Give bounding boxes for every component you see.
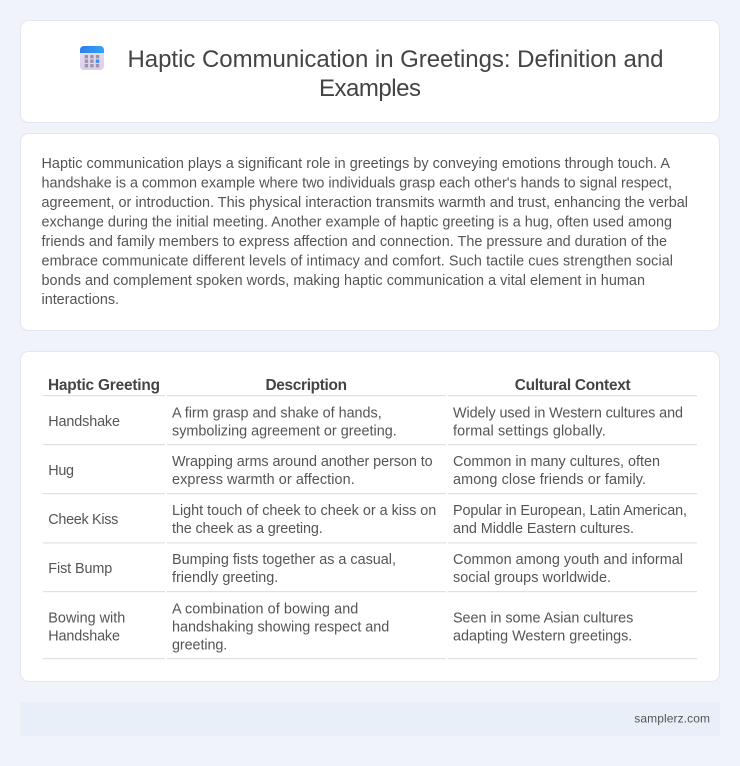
footer — [20, 702, 720, 736]
table row: handshake: symbolizing agreement or greeting. — [172, 423, 397, 439]
table row: cheek kiss — [48, 503, 687, 537]
text block: introduction paragraph: handshake is a common example where two individuals grasp each other's hands to signal respect, — [42, 176, 672, 192]
table row: fist bump: Bumping fists together as a casual, — [172, 552, 396, 568]
text block: introduction paragraph: exchange during the initial meeting. Another example of haptic greeting is a hug, often used among — [42, 214, 672, 230]
table row: handshake: Widely used in Western cultures and — [453, 405, 683, 421]
table row: handshake: formal settings globally. — [453, 423, 606, 439]
table header — [48, 377, 631, 394]
table row: hug: among close friends or family. — [453, 472, 646, 488]
table row: handshake: A firm grasp and shake of hands, — [172, 405, 382, 421]
table row: bowing with handshake: Bowing with — [48, 610, 125, 626]
title — [128, 46, 664, 102]
table row: bowing with handshake: Seen in some Asian cultures — [453, 610, 633, 626]
table header: Description — [266, 377, 347, 394]
text block: introduction paragraph: friends and family members to express affection and connection. The pressure and duration of the — [42, 234, 667, 250]
table header: Cultural Context — [515, 377, 631, 394]
table row: bowing with handshake: A combination of bowing and — [172, 601, 358, 617]
title: Examples — [319, 75, 421, 102]
table row: hug: Hug — [48, 463, 74, 479]
table row: cheek kiss: and Middle Eastern cultures. — [453, 521, 634, 537]
table row: fist bump: Fist Bump — [48, 561, 112, 577]
table row: bowing with handshake: handshaking showing respect and — [172, 619, 389, 635]
table row: hug: Common in many cultures, often — [453, 454, 660, 470]
icon: calendar — [80, 46, 104, 70]
table row: cheek kiss: Light touch of cheek to cheek or a kiss on — [172, 503, 436, 519]
text block: introduction paragraph: embrace communicate different levels of intimacy and comfort. Such tactile cues strengthen social — [42, 254, 673, 270]
table row: cheek kiss: the cheek as a greeting. — [172, 521, 323, 537]
panel: table card — [20, 352, 720, 682]
text block: introduction paragraph: agreement, or introduction. This physical interaction transmits warmth and trust, enhancing the verbal — [42, 195, 688, 211]
text block: introduction paragraph: bonds and complement spoken words, making haptic communication a vital element in human — [42, 273, 645, 289]
table row: hug: express warmth or affection. — [172, 472, 355, 488]
table row: hug — [48, 454, 660, 488]
table row: cheek kiss: Popular in European, Latin American, — [453, 503, 687, 519]
text block: introduction paragraph — [42, 156, 688, 308]
table row: fist bump: friendly greeting. — [172, 570, 278, 586]
text block: introduction paragraph: Haptic communication plays a significant role in greetings by conveying emotions through touch. A — [42, 156, 670, 172]
table row: bowing with handshake — [48, 601, 633, 653]
footer: samplerz.com — [634, 712, 710, 726]
table row: hug: Wrapping arms around another person to — [172, 454, 433, 470]
text block: introduction paragraph: interactions. — [42, 292, 119, 308]
table row: bowing with handshake: greeting. — [172, 637, 227, 653]
panel: introduction — [20, 134, 720, 330]
table row: cheek kiss: Cheek Kiss — [48, 512, 118, 528]
table row: fist bump — [48, 552, 683, 586]
table row: handshake: Handshake — [48, 414, 120, 430]
table row: bowing with handshake: adapting Western greetings. — [453, 628, 632, 644]
table row: handshake — [48, 405, 683, 439]
panel: title card — [20, 20, 720, 122]
title: Haptic Communication in Greetings: Definition and — [128, 46, 664, 73]
table header: Haptic Greeting — [48, 377, 160, 394]
table row: fist bump: Common among youth and informal — [453, 552, 683, 568]
table row: bowing with handshake: Handshake — [48, 628, 120, 644]
table row: fist bump: social groups worldwide. — [453, 570, 611, 586]
